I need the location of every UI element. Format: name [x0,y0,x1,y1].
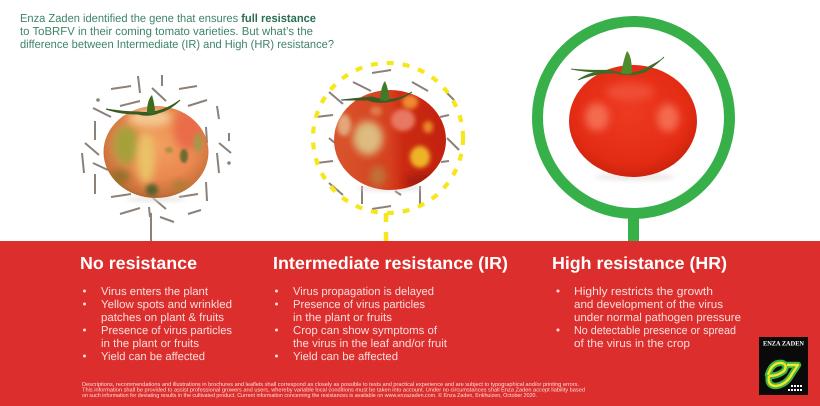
column: intermediate resistance: Crop can show symptoms of [293,325,438,337]
tomato: no resistance [104,95,208,202]
column: intermediate resistance: Virus propagation is delayed [293,286,434,298]
disclaimer: on such information for deviating results in the cultivated product. Current information concerning the resistances is available on www.enzazaden.com. © Enza Zaden, Enkhuizen, October 2020. [82,392,537,399]
column: no resistance: patches on plant & fruits [101,312,224,324]
virus dashes: no resistance [82,75,231,222]
heading: intermediate resistance: Intermediate resistance (IR) [273,253,508,273]
column: high resistance: No detectable presence or spread [574,325,736,337]
column: high resistance: Highly restricts the growth [574,286,713,298]
column: no resistance: in the plant or fruits [101,338,199,350]
column: no resistance: Yellow spots and wrinkled [101,299,232,311]
column: no resistance: Virus enters the plant [101,286,209,298]
column: high resistance: under normal pathogen pressure [574,312,741,324]
heading: high resistance: High resistance (HR) [552,253,727,273]
dashed stem: intermediate resistance [384,213,388,241]
column: intermediate resistance [273,253,508,363]
red panel [0,241,820,406]
column: intermediate resistance: Presence of virus particles [293,299,425,311]
stem: high resistance [628,218,639,242]
column: intermediate resistance: the virus in the leaf and/or fruit [293,338,448,350]
column: intermediate resistance: Yield can be affected [293,351,398,363]
column: no resistance: Yield can be affected [101,351,205,363]
virus dashes: intermediate resistance [316,70,459,209]
column: no resistance: Presence of virus particles [101,325,232,337]
tomato: intermediate resistance [334,81,446,192]
dashed ring: intermediate resistance [313,63,463,213]
disclaimer [82,381,585,399]
solid ring: high resistance [538,22,730,214]
disclaimer: This information shall be provided to assist professional growers and users, whereby variable local conditions must be taken into account. Under no circumstances shall Enza Zaden accept liability based [82,386,585,394]
column: no resistance [80,253,232,363]
column: high resistance [552,253,741,350]
logo: Enza Zaden [759,337,808,395]
stem: no resistance [150,213,152,241]
column: intermediate resistance: in the plant or fruits [293,312,392,324]
intro text: to ToBRFV in their coming tomato varieties. But what’s the [20,25,313,38]
logo: Enza Zaden: ENZA ZADEN [763,340,804,348]
heading: no resistance: No resistance [80,253,197,273]
column: high resistance: and development of the virus [574,299,723,311]
intro text [20,12,335,51]
tomato: high resistance [569,51,697,181]
column: high resistance: of the virus in the crop [574,338,690,350]
intro text: Enza Zaden identified the gene that ensures full resistance [20,12,317,25]
disclaimer: Descriptions, recommendations and illustrations in brochures and leaflets shall correspond as closely as possible to tests and practical experience and are subject to typographical and/or printing errors. [82,381,579,388]
intro text: difference between Intermediate (IR) and High (HR) resistance? [20,38,335,51]
